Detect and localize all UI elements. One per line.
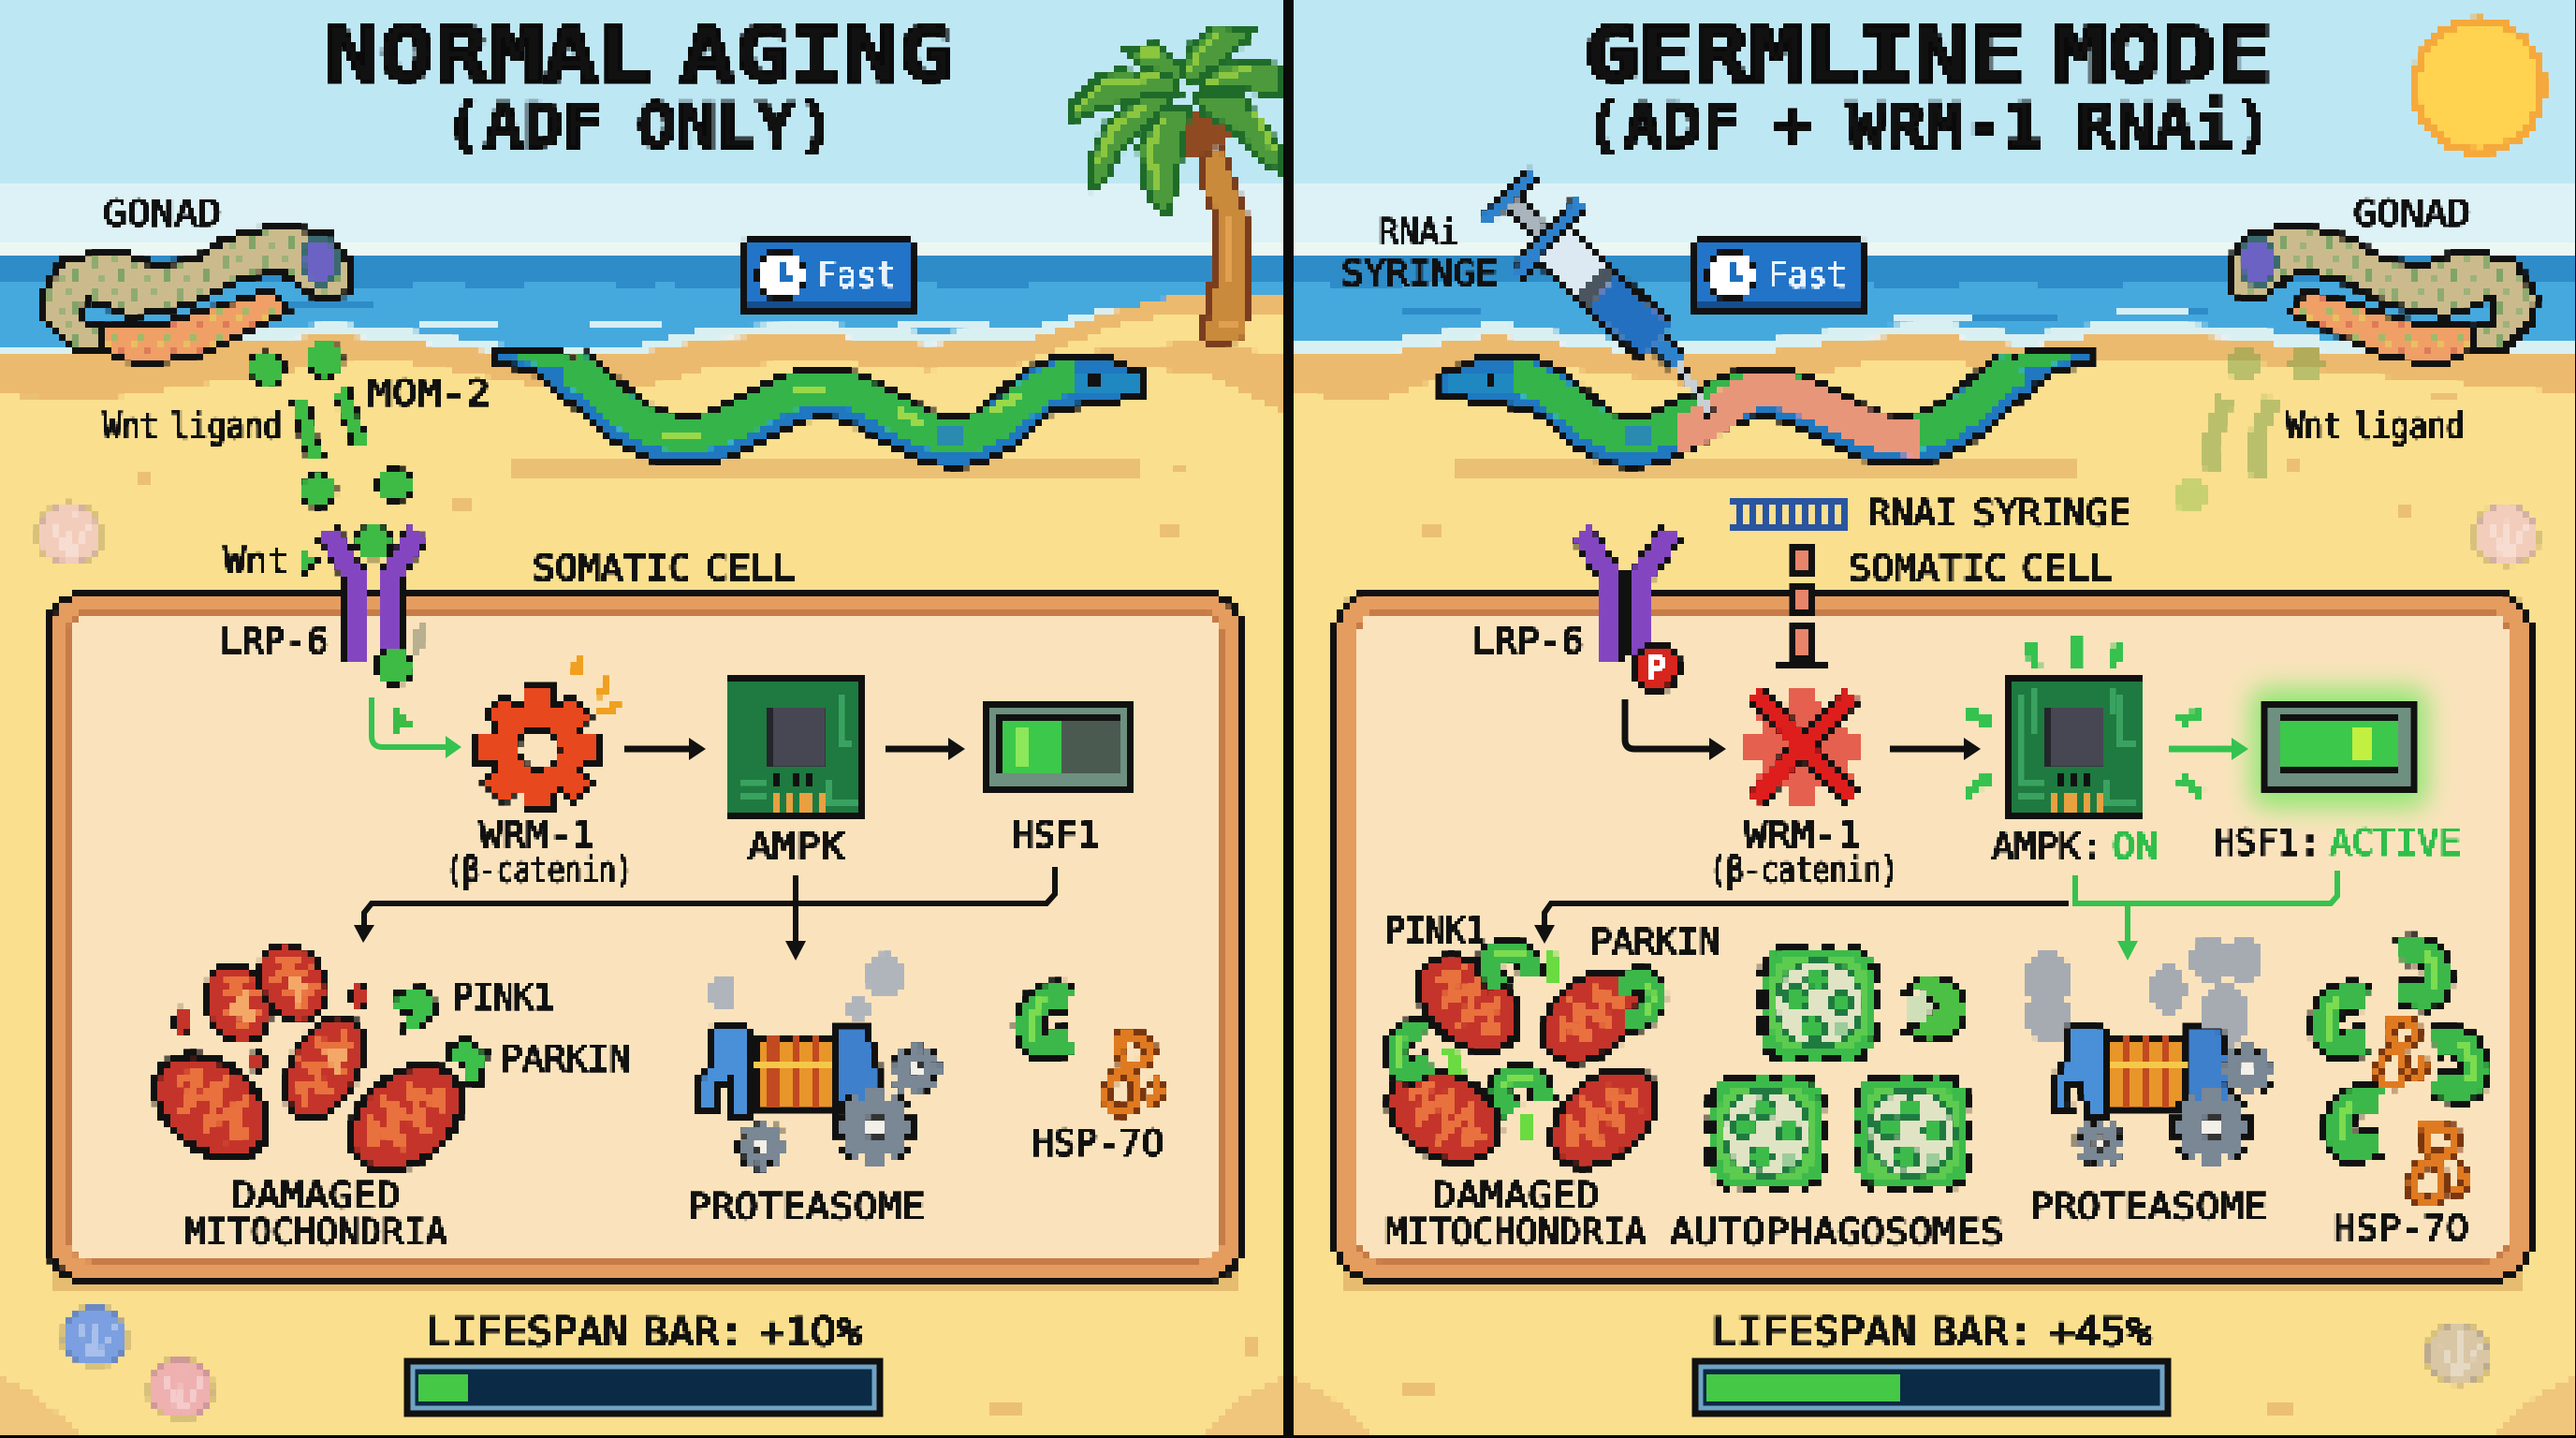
titles [325,11,2273,162]
AMPK chip active [1964,637,2203,818]
receptor: LRP-6 phosphorylated [1582,532,1672,663]
labels: germline mode: PARKIN [1590,921,1720,962]
HSF1 switch [984,704,1132,792]
labels: germline mode: SYRINGE [1341,253,1498,294]
labels: germline mode: MITOCHONDRIA [1385,1211,1647,1253]
lifespan bar: right [1695,1361,2168,1414]
labels: normal aging: LRP-6 [220,621,329,662]
pathway arrows: normal aging [354,697,1055,961]
Wnt ligand dots [249,341,412,575]
labels: normal aging: WRM-1 [479,814,595,856]
labels: germline mode: LIFESPAN BAR: +45% [1711,1309,2152,1355]
labels: germline mode: HSF1: [2214,822,2320,863]
labels: germline mode: AMPK: [1992,826,2102,867]
labels: germline mode: AUTOPHAGOSOMES [1670,1211,2004,1253]
HSP-70 [1030,996,1160,1111]
labels: normal aging: MITOCHONDRIA [184,1211,447,1253]
panel: normal aging [41,26,1282,663]
labels: normal aging: SOMATIC CELL [533,548,796,589]
labels: normal aging: Wnt ligand [103,405,282,447]
PINK1 and PARKIN [393,987,487,1086]
panel: germline mode [1442,21,2542,667]
labels: normal aging: PARKIN [501,1038,631,1079]
labels: normal aging: PINK1 [453,976,554,1018]
worm: green [497,351,1146,444]
labels: normal aging: MOM-2 [368,373,490,414]
worm: green with pink gut [1442,351,2090,444]
labels: germline mode: SOMATIC CELL [1849,548,2112,589]
labels: normal aging: GONAD [103,193,222,234]
title: normal aging: NORMAL AGING [325,11,953,99]
labels: germline mode: (β-catenin) [1709,849,1898,890]
labels: germline mode: PINK1 [1385,910,1486,951]
HSP-70 cluster [2325,950,2475,1201]
AMPK chip [727,678,864,818]
central divider [1283,0,1294,1438]
pathway arrows: germline mode [1534,699,2337,961]
labels: germline mode: Wnt ligand [2286,405,2465,447]
HSF1 switch active [2267,704,2411,792]
labels: normal aging: Fast [817,255,896,296]
WRM-1 gear [478,689,598,809]
faded Wnt ligand [2174,347,2323,514]
labels: normal aging: HSP-70 [1032,1123,1164,1164]
receptor stems over cell: left [355,585,423,732]
labels: germline mode [1341,193,2471,1355]
labels: normal aging [103,193,1164,1355]
title: germline mode: GERMLINE MODE [1584,11,2272,99]
sparks [576,655,620,712]
illustration layer: germline mode [1442,21,2542,667]
mitochondria with PINK1 and PARKIN [1372,937,1676,1187]
labels: normal aging: PROTEASOME [687,1186,925,1227]
labels: germline mode: HSP-70 [2334,1208,2469,1249]
RNAi syringe [1484,172,1711,415]
labels: normal aging: (β-catenin) [446,849,633,890]
gonad [2229,225,2537,365]
subtitle: germline mode: (ADF + WRM-1 RNAi) [1584,90,2273,162]
labels: germline mode: WRM-1 [1744,814,1861,856]
labels: germline mode: GONAD [2353,193,2471,234]
labels: germline mode: DAMAGED [1432,1175,1600,1216]
labels: germline mode: RNAI SYRINGE [1868,492,2130,534]
inhibition: RNAi T-bar [1729,498,1851,667]
somatic cell box: left [48,594,1242,1292]
speed badge [1693,240,1866,313]
palm tree [1069,26,1282,344]
somatic cell box: right [1336,594,2530,1292]
labels: germline mode: P [1646,648,1666,689]
glow behind HSF1 switch [2251,688,2427,808]
receptor: LRP-6 [327,523,418,663]
lifespan bar: left [407,1361,880,1414]
damaged mitochondria [136,932,482,1191]
labels: normal aging: LIFESPAN BAR: +1 0% [426,1309,862,1355]
gonad [41,225,349,365]
labels: germline mode: ON [2112,826,2159,867]
labels: normal aging: AMPK [748,826,844,867]
labels: germline mode: ACTIVE [2330,822,2461,863]
WRM-1 knocked out gear [1744,686,1864,806]
receptor stems and phospho tag over cell: right [1610,585,1830,691]
labels: germline mode: Fast [1768,255,1847,296]
labels: germline mode: LRP-6 [1472,621,1584,662]
autophagosomes [1710,947,1968,1189]
illustration layer: normal aging [41,26,1282,663]
cell contents: germline mode [1372,637,2475,1201]
shells [37,504,2538,1418]
subtitle: normal aging: (ADF ONLY) [444,90,836,162]
speed badge [742,240,915,313]
proteasome active [2024,935,2273,1167]
labels: normal aging: HSF1 [1012,814,1099,856]
labels: germline mode: PROTEASOME [2029,1186,2267,1227]
sun [2415,21,2542,152]
labels: normal aging: Wnt [224,540,289,581]
proteasome [698,953,941,1170]
labels: normal aging: DAMAGED [232,1175,401,1216]
labels: germline mode: RNAi [1379,212,1459,253]
cell contents: normal aging [136,655,1160,1191]
